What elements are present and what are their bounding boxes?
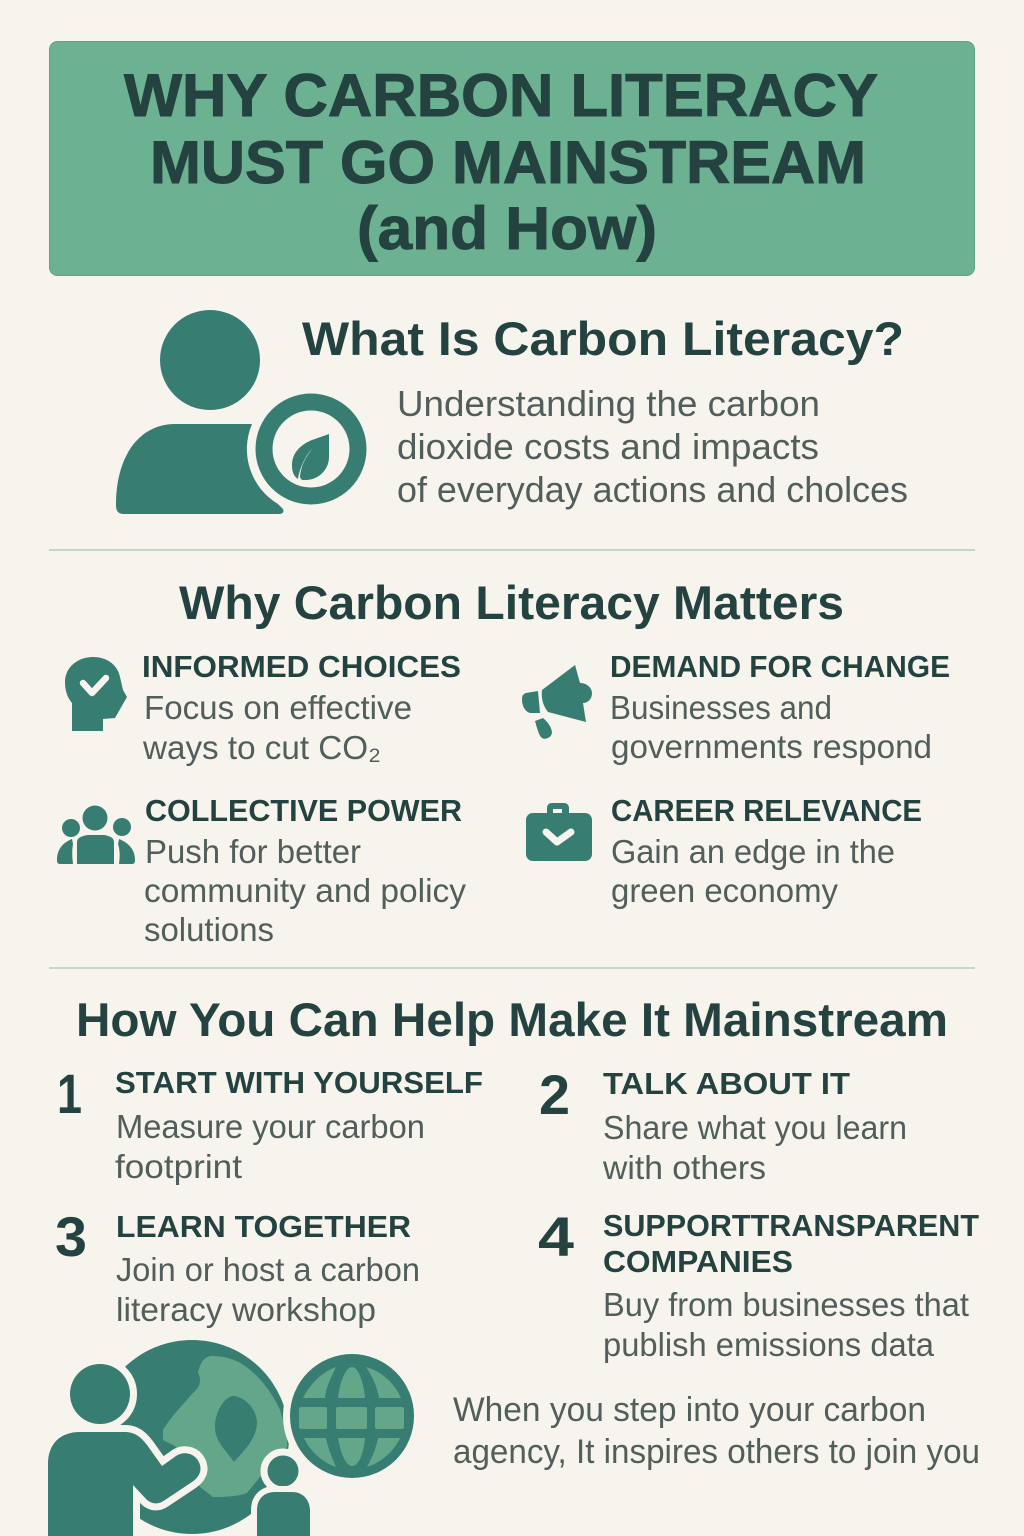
step 4: support transparent companies: publish emissions data [603,1326,935,1363]
item: demand for change: DEMAND FOR CHANGE [610,649,950,684]
step 2: talk about it: with others [602,1149,766,1186]
icon: adult figure [48,1364,201,1536]
step 3: learn together: Join or host a carbon [116,1251,420,1288]
icon: briefcase with check [526,803,592,861]
closing message: agency, It inspires others to join you [453,1433,980,1471]
heading: how you can help make it mainstream: How You Can Help Make It Mainstream [76,993,948,1046]
step 1: start with yourself: 1 [57,1062,82,1125]
step 2: talk about it: 2 [539,1063,570,1126]
step 4: support transparent companies: 4 [538,1205,574,1268]
item: informed choices [65,649,461,766]
step 3: learn together [55,1205,420,1328]
step 3: learn together: LEARN TOGETHER [116,1209,411,1244]
item: informed choices: INFORMED CHOICES [142,649,461,684]
definition text: dioxide costs and impacts [397,426,819,467]
step 2: talk about it: Share what you learn [603,1109,907,1146]
item: informed choices: ways to cut CO₂ [142,729,381,766]
item: collective power [57,793,466,948]
step 1: start with yourself [57,1062,483,1185]
definition text [397,383,908,510]
step 2: talk about it [539,1063,907,1186]
step 3: learn together: literacy workshop [116,1291,376,1328]
item: collective power: COLLECTIVE POWER [145,793,462,828]
heading: why carbon literacy matters: Why Carbon Literacy Matters [179,576,844,629]
title banner [50,42,974,276]
step 4: support transparent companies: SUPPORTTRANSPARENT [603,1208,979,1243]
panel: how you can help [55,993,979,1363]
icon: megaphone [522,665,592,739]
closing message: When you step into your carbon [453,1391,926,1429]
step 1: start with yourself: START WITH YOURSELF [115,1065,483,1100]
illustration: people with globe [48,1340,421,1536]
definition text: Understanding the carbon [397,383,820,424]
item: career relevance: Gain an edge in the [611,833,895,870]
closing message [453,1391,980,1471]
item: career relevance [526,793,922,909]
heading: what is carbon literacy: What Is Carbon Literacy? [302,312,904,365]
icon: small grid globe [283,1347,421,1485]
item: demand for change [522,649,950,765]
item: collective power: community and policy [144,872,466,909]
item: demand for change: Businesses and [610,689,832,726]
step 4: support transparent companies [538,1205,979,1363]
item: career relevance: green economy [611,872,838,909]
item: informed choices: Focus on effective [144,689,412,726]
icon: child figure [257,1456,310,1536]
icon: group of people [57,806,135,864]
title banner: WHY CARBON LITERACY [124,62,878,129]
item: career relevance: CAREER RELEVANCE [611,793,922,828]
step 2: talk about it: TALK ABOUT IT [603,1066,850,1101]
panel: why carbon literacy matters [57,576,950,948]
panel: what is carbon literacy [116,310,908,514]
item: demand for change: governments respond [611,728,932,765]
icon: person with leaf badge [116,310,366,514]
step 4: support transparent companies: COMPANIES [603,1244,793,1279]
step 1: start with yourself: footprint [115,1148,242,1185]
title banner: (and How) [357,195,657,262]
item: collective power: Push for better [145,833,361,870]
step 1: start with yourself: Measure your carbon [116,1108,425,1145]
step 3: learn together: 3 [55,1205,87,1268]
icon: head with check [65,657,127,731]
step 4: support transparent companies: Buy from businesses that [603,1286,969,1323]
title banner: MUST GO MAINSTREAM [150,129,866,196]
item: collective power: solutions [144,911,274,948]
definition text: of everyday actions and cholces [397,469,908,510]
icon: large globe [95,1340,289,1534]
